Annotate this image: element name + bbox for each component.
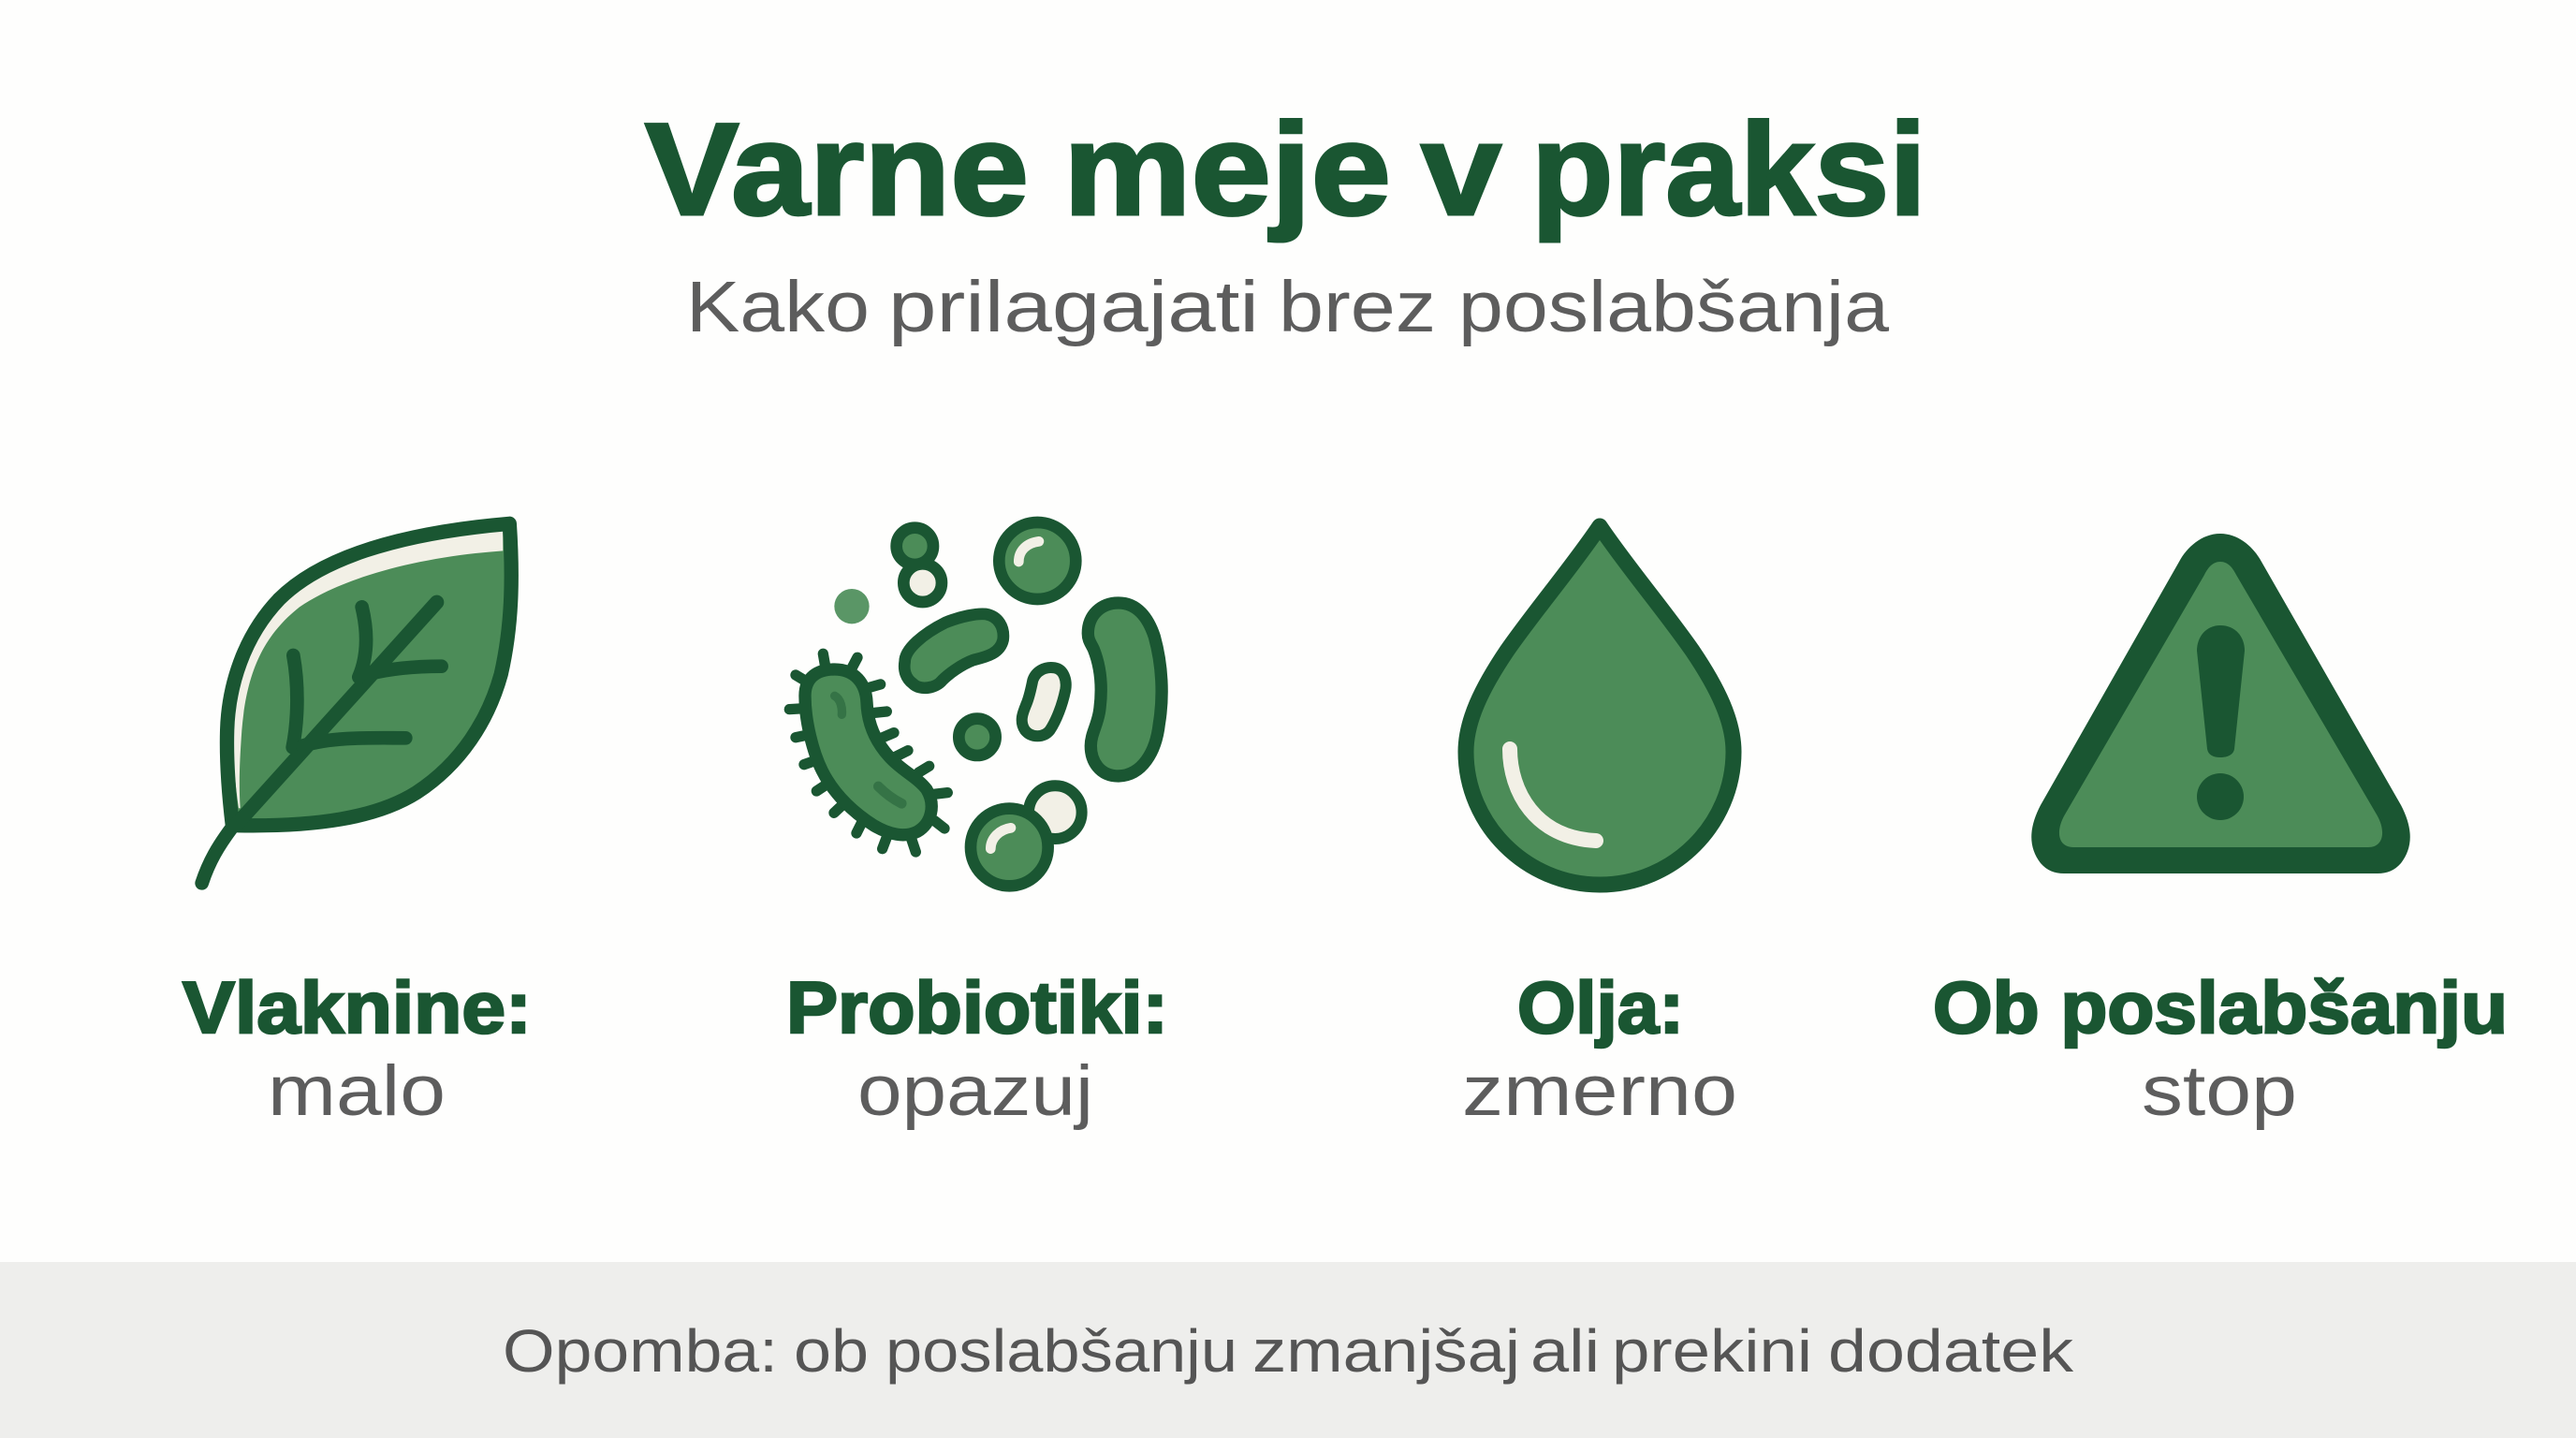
label: oils: zmerno: [1462, 1051, 1737, 1131]
subtitle: poslabšanja: [1458, 267, 1889, 347]
label: probiotics: Probiotiki:: [786, 966, 1168, 1049]
title: Varne: [645, 95, 1029, 242]
footer note: prekini: [1612, 1317, 1812, 1385]
label: fibre: [183, 966, 532, 1131]
label: on worsening: Ob poslabšanju: [1933, 966, 2508, 1049]
label: on worsening: stop: [2142, 1051, 2297, 1131]
footer note: dodatek: [1828, 1317, 2074, 1385]
footer note: zmanjšaj: [1252, 1317, 1520, 1385]
subtitle: brez: [1279, 267, 1436, 347]
icon: warning triangle: [2031, 534, 2410, 873]
title: v: [1421, 95, 1501, 242]
title: meje: [1063, 95, 1391, 242]
footer note: ali: [1530, 1317, 1600, 1385]
footer note: Opomba:: [503, 1317, 778, 1385]
subtitle: Kako: [686, 267, 870, 347]
footer band: [0, 1262, 2576, 1438]
subtitle: prilagajati: [888, 267, 1259, 347]
label: fibre: Vlaknine:: [183, 966, 532, 1049]
footer note: ob: [794, 1317, 869, 1385]
label: fibre: malo: [268, 1051, 446, 1131]
label: oils: [1462, 966, 1737, 1131]
label: probiotics: opazuj: [857, 1051, 1093, 1131]
label: oils: Olja:: [1517, 966, 1684, 1049]
label: on worsening: [1933, 966, 2508, 1131]
icon: oil drop: [1466, 526, 1734, 885]
footer note: poslabšanju: [886, 1317, 1237, 1385]
title: praksi: [1531, 95, 1926, 242]
icon: probiotics: [789, 522, 1162, 886]
icon: leaf: [202, 523, 511, 883]
label: probiotics: [786, 966, 1168, 1131]
